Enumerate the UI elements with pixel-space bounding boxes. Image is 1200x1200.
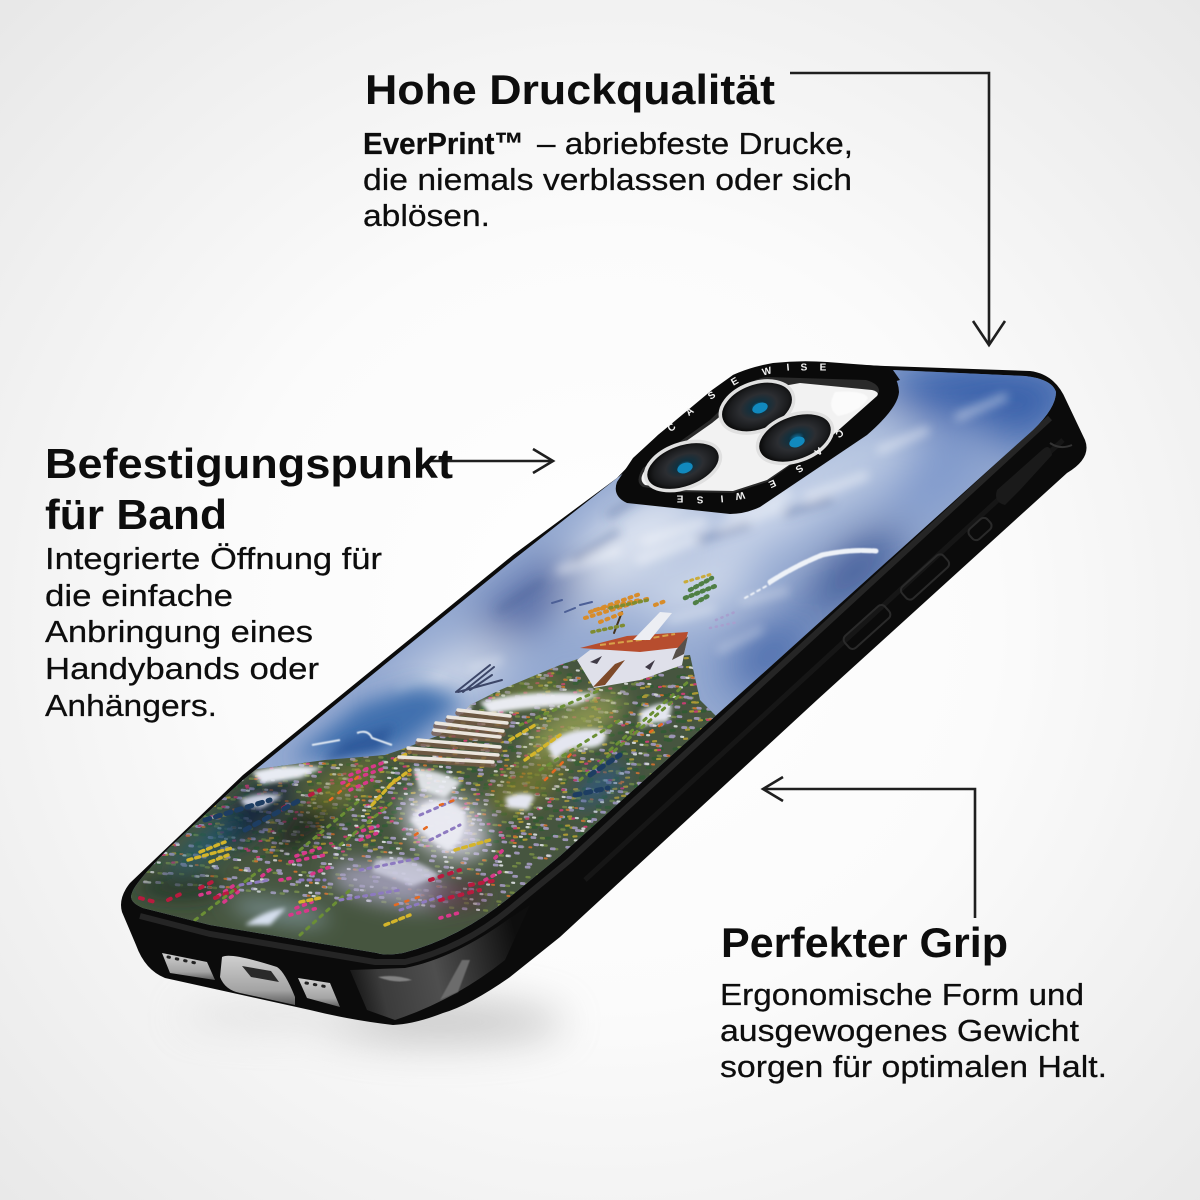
CASEWISE lettering bbox=[666, 362, 845, 505]
camera island bbox=[616, 361, 899, 514]
side buttons bbox=[842, 516, 994, 651]
printed artwork bbox=[120, 360, 1085, 980]
body text: Handybands oder bbox=[45, 651, 319, 686]
heading: Perfekter Grip bbox=[721, 919, 1008, 966]
body text: Integrierte Öffnung für bbox=[45, 541, 382, 576]
cottage bbox=[577, 612, 688, 688]
case rim highlight bbox=[140, 418, 1050, 962]
callout: band attachment bbox=[45, 440, 453, 723]
body text: ausgewogenes Gewicht bbox=[720, 1013, 1079, 1048]
regional colour washes bbox=[135, 671, 633, 932]
trees bbox=[552, 574, 738, 633]
sea bbox=[290, 685, 465, 762]
CASEWISE lettering: C bbox=[666, 421, 678, 435]
body text bbox=[720, 977, 1107, 1084]
CASEWISE lettering: I bbox=[720, 492, 724, 504]
body text: Anhängers. bbox=[45, 688, 217, 723]
phone shadow bbox=[180, 1000, 565, 1044]
island inner wall bbox=[638, 377, 879, 493]
CASEWISE lettering: E bbox=[820, 362, 827, 374]
sky bbox=[120, 360, 1085, 970]
cloud crest bbox=[745, 550, 876, 598]
CASEWISE lettering: E bbox=[766, 477, 777, 490]
body text: Anbringung eines bbox=[45, 614, 313, 649]
body text bbox=[363, 126, 853, 233]
CASEWISE lettering: S bbox=[800, 362, 808, 374]
heading: Hohe Druckqualität bbox=[365, 66, 775, 113]
rocks bbox=[240, 692, 672, 925]
CASEWISE lettering: I bbox=[786, 362, 790, 374]
body text: EverPrint™ bbox=[363, 126, 524, 161]
heading: für Band bbox=[45, 491, 227, 538]
body text: ablösen. bbox=[363, 198, 490, 233]
lens glass panel bbox=[642, 383, 878, 491]
heading: Befestigungspunkt bbox=[45, 440, 453, 487]
CASEWISE lettering: A bbox=[812, 444, 824, 458]
body text: die einfache bbox=[45, 578, 233, 613]
body text bbox=[45, 541, 382, 723]
painted dabs bbox=[142, 657, 714, 912]
CASEWISE lettering: E bbox=[676, 492, 683, 504]
camera lenses bbox=[639, 371, 840, 500]
band slot bbox=[996, 447, 1052, 505]
CASEWISE lettering: S bbox=[696, 493, 704, 505]
callout: grip bbox=[720, 919, 1107, 1084]
phone case bbox=[121, 362, 1087, 1025]
CASEWISE lettering: W bbox=[734, 489, 746, 501]
body text: – abriebfeste Drucke, bbox=[537, 126, 853, 161]
CASEWISE lettering: A bbox=[684, 405, 696, 419]
heading bbox=[45, 440, 453, 538]
body text: Ergonomische Form und bbox=[720, 977, 1084, 1012]
CASEWISE lettering: S bbox=[706, 389, 718, 402]
callout: print quality bbox=[363, 66, 853, 233]
arrow: print quality bbox=[790, 73, 1005, 345]
body text: die niemals verblassen oder sich bbox=[363, 162, 852, 197]
right speaker bbox=[298, 978, 340, 1007]
hill and meadow bbox=[131, 655, 716, 954]
arrow: band attachment bbox=[430, 449, 553, 473]
CASEWISE lettering: W bbox=[761, 365, 774, 379]
wooden stairs bbox=[399, 665, 510, 765]
USB port bbox=[220, 956, 295, 1005]
CASEWISE lettering: C bbox=[833, 426, 845, 440]
CASEWISE lettering: E bbox=[729, 375, 741, 388]
painterly streaks bbox=[400, 395, 1010, 690]
corner reflection bbox=[350, 905, 530, 1020]
CASEWISE lettering: S bbox=[793, 462, 805, 475]
case body bbox=[121, 362, 1087, 1025]
left speaker bbox=[162, 953, 215, 980]
arrow: grip bbox=[763, 777, 975, 918]
flower clusters bbox=[140, 680, 690, 935]
body text: sorgen für optimalen Halt. bbox=[720, 1049, 1107, 1084]
